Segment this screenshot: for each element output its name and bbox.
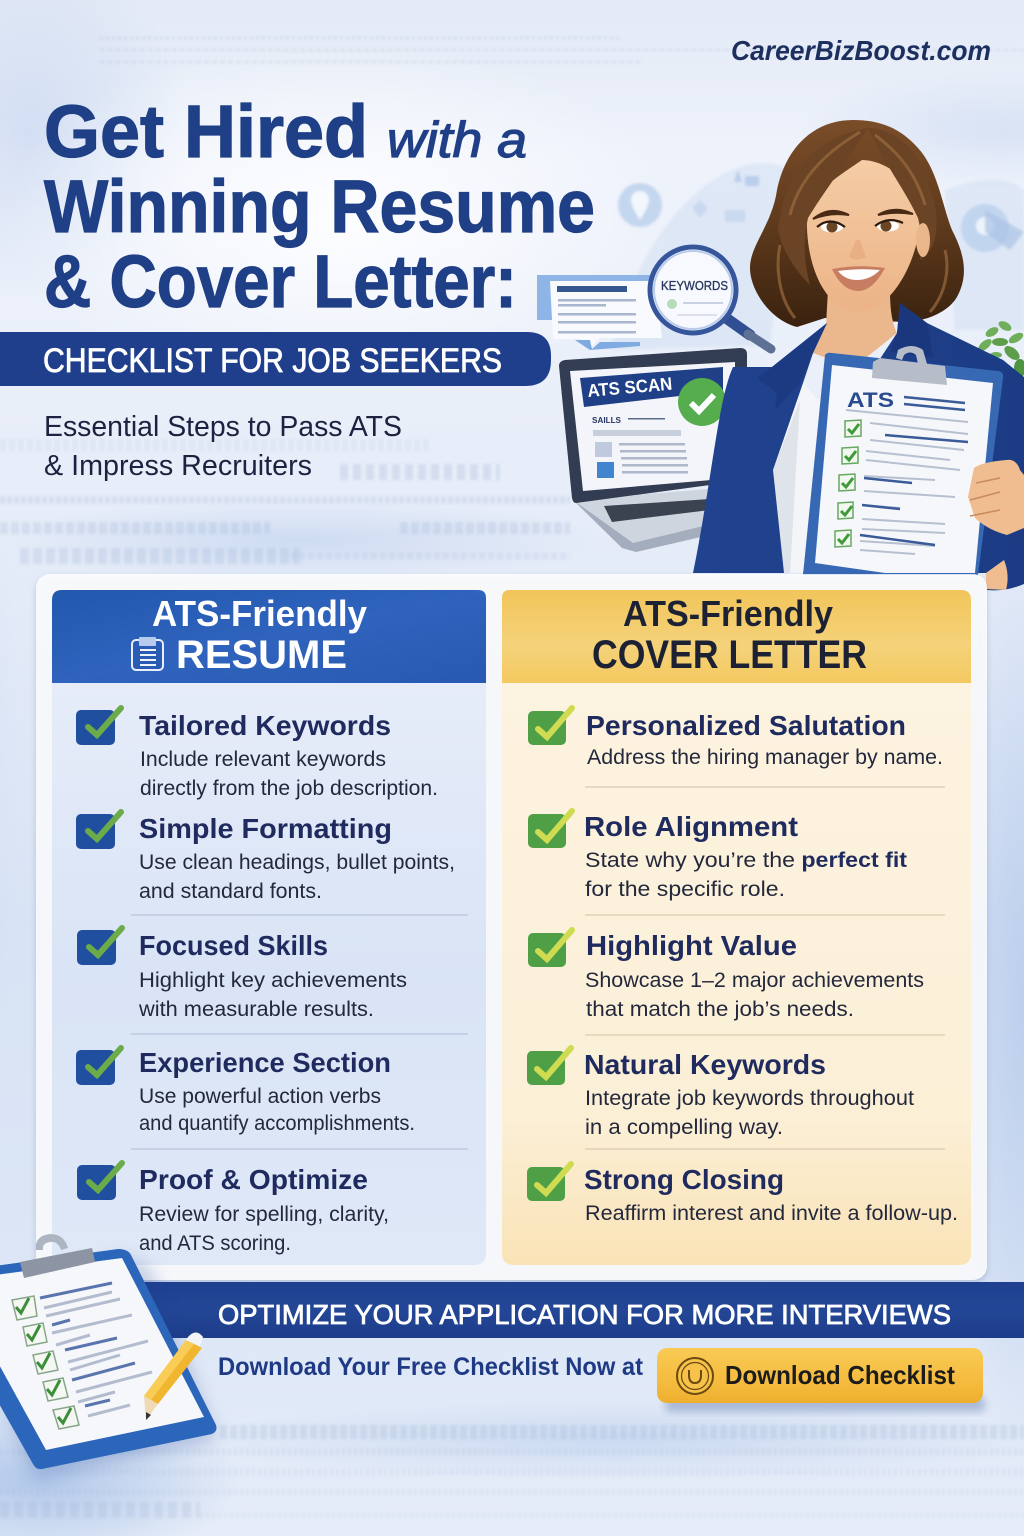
item: Experience Section: Experience Section [139, 1047, 391, 1078]
panel: resume column [52, 590, 486, 1265]
item: Strong Closing [584, 1164, 958, 1225]
item: Role Alignment [584, 811, 907, 901]
item: Simple Formatting: Simple Formatting [139, 813, 392, 844]
resume heading [152, 593, 367, 677]
ear [916, 223, 930, 257]
item: Focused Skills: Highlight key achievements [139, 969, 407, 992]
download button [657, 1348, 985, 1412]
icon: resume document [132, 637, 163, 670]
item: Experience Section [139, 1047, 415, 1135]
icon: blue check 5 [77, 1163, 122, 1200]
title: Winning Resume [44, 165, 595, 248]
call-to-action banner [140, 1282, 1024, 1338]
item: Natural Keywords [584, 1049, 914, 1139]
icon: blue check 2 [76, 812, 121, 849]
hair back [750, 120, 964, 327]
item: Personalized Salutation [586, 710, 943, 769]
call-to-action banner: OPTIMIZE YOUR APPLICATION FOR MORE INTERVIEWS [218, 1299, 951, 1330]
subtitle ribbon [0, 332, 551, 386]
item: Focused Skills: Focused Skills [139, 930, 328, 961]
item: Tailored Keywords [139, 710, 438, 800]
tagline [44, 411, 402, 482]
nose [849, 240, 866, 260]
illustration: laptop ATS scan: ATS SCAN [587, 374, 673, 401]
cover letter heading [592, 593, 867, 677]
clipboard held by the woman [803, 346, 1003, 575]
item: Natural Keywords: in a compelling way. [585, 1116, 783, 1139]
clipboard held by the woman: ATS [847, 389, 894, 412]
title [44, 90, 595, 323]
illustration: magnifying glass with keywords [650, 247, 771, 349]
illustration: plant [976, 319, 1024, 377]
download button: Download Checklist [725, 1360, 955, 1390]
cover letter heading: ATS-Friendly [623, 593, 833, 634]
blouse [773, 365, 875, 573]
item: Tailored Keywords: Tailored Keywords [139, 710, 391, 741]
illustration: businesswoman holding clipboard [693, 120, 1024, 590]
resume heading: ATS-Friendly [152, 593, 367, 634]
icon: green check 5 [527, 1164, 571, 1201]
item: Strong Closing: Reaffirm interest and invite a follow-up. [585, 1202, 958, 1225]
title: with a [387, 112, 527, 168]
item: Simple Formatting: Use clean headings, bullet points, [139, 851, 455, 874]
item: Strong Closing: Strong Closing [584, 1164, 784, 1195]
smile [832, 266, 885, 291]
title: & Cover Letter: [44, 240, 517, 323]
title: Get Hired [44, 90, 368, 173]
icon: blue check 4 [76, 1048, 121, 1085]
jacket [693, 303, 1024, 590]
icon: green check 3 [528, 930, 572, 967]
hair fringe [778, 128, 937, 285]
subtitle ribbon: CHECKLIST FOR JOB SEEKERS [43, 342, 502, 380]
illustration: clipboard and pencil [0, 1234, 216, 1476]
illustration: laptop ATS scan [559, 348, 747, 552]
item: Tailored Keywords: directly from the job description. [140, 777, 438, 800]
illustration: resume document [537, 275, 662, 350]
item: Simple Formatting [139, 813, 455, 903]
item: Proof & Optimize: Review for spelling, clarity, [139, 1203, 389, 1226]
download prompt: Download Your Free Checklist Now at [218, 1353, 644, 1381]
item: Focused Skills [138, 930, 407, 1021]
item: Natural Keywords: Natural Keywords [584, 1049, 826, 1080]
item: Role Alignment: for the specific role. [585, 878, 785, 901]
neck and chest [813, 290, 897, 368]
item: Highlight Value: that match the job’s needs. [586, 998, 854, 1021]
item: Experience Section: Use powerful action verbs [139, 1085, 381, 1108]
main checklist panel [36, 574, 987, 1280]
item: Highlight Value: Highlight Value [586, 930, 797, 961]
item: Proof & Optimize [139, 1164, 389, 1255]
item: Personalized Salutation: Personalized Salutation [586, 710, 906, 741]
item: Role Alignment: State why you’re the perfect fit [585, 849, 907, 872]
illustration: magnifying glass with keywords: KEYWORDS [661, 278, 728, 293]
tagline: & Impress Recruiters [44, 450, 312, 482]
item: Natural Keywords: Integrate job keywords throughout [585, 1087, 914, 1110]
clipboard clip [20, 1234, 95, 1278]
item: Tailored Keywords: Include relevant keywords [140, 748, 386, 771]
item: Personalized Salutation: Address the hiring manager by name. [587, 746, 943, 769]
cover letter heading: COVER LETTER [592, 633, 867, 677]
item: Role Alignment: Role Alignment [584, 811, 798, 842]
eyes [817, 220, 903, 232]
panel: cover letter column [502, 590, 971, 1265]
illustration: laptop ATS scan: SAILLS [592, 416, 622, 425]
tagline: Essential Steps to Pass ATS [44, 411, 402, 443]
icon: smile badge [677, 1358, 713, 1394]
icon: green check 4 [527, 1048, 571, 1085]
pencil [144, 1332, 203, 1420]
eyebrows [813, 210, 913, 219]
hand [968, 460, 1024, 590]
background decorative scene behind the woman [610, 163, 1024, 350]
item: Experience Section: and quantify accomplishments. [139, 1112, 415, 1135]
item: Highlight Value: Showcase 1–2 major achievements [585, 969, 924, 992]
icon: blue check 3 [77, 928, 122, 965]
icon: blue check 1 [76, 708, 121, 745]
face [807, 160, 921, 312]
icon: green check 2 [528, 811, 572, 848]
icon: green check 1 [528, 708, 572, 745]
item: Focused Skills: with measurable results. [138, 998, 374, 1021]
brand url: CareerBizBoost.com [731, 35, 991, 66]
item: Proof & Optimize: and ATS scoring. [139, 1232, 291, 1255]
item: Highlight Value [585, 930, 924, 1021]
resume heading: RESUME [176, 633, 347, 677]
item: Simple Formatting: and standard fonts. [139, 880, 322, 903]
item: Proof & Optimize: Proof & Optimize [139, 1164, 368, 1195]
